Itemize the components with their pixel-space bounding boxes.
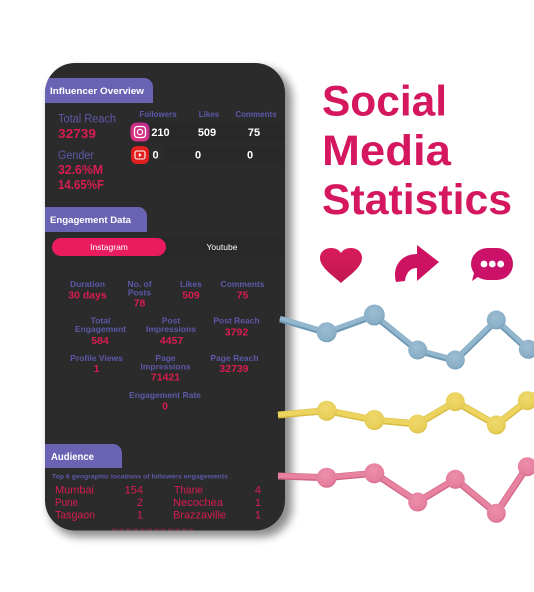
metric: comments [220, 281, 264, 298]
locations table: 1 [255, 510, 261, 522]
line chart: yellow series [278, 391, 534, 434]
metric: page impressions [141, 355, 190, 380]
metric: post impressions: 4457 [160, 335, 183, 347]
table header: Followers [139, 110, 177, 119]
locations table: 154 [125, 484, 143, 496]
toggle: instagram / youtube: Instagram [90, 242, 128, 252]
icon: heart [320, 248, 362, 283]
metric: post impressions: Impressions [146, 324, 196, 334]
icon: comment bubble [471, 248, 513, 281]
stat: gender: 32.6%M [58, 163, 103, 177]
locations table: 4 [255, 484, 261, 496]
metric: page reach [210, 355, 258, 372]
row: instagram [130, 122, 260, 142]
row: instagram: 509 [198, 127, 216, 139]
row: instagram: 75 [248, 127, 260, 139]
row: instagram: 210 [151, 127, 170, 139]
metric: post impressions: Post [162, 316, 180, 326]
metric: likes [180, 281, 202, 298]
tab: Influencer Overview: Influencer Overview [50, 86, 145, 97]
metric: total engagement [76, 318, 126, 344]
metric: engagement rate: Engagement Rate [129, 390, 201, 400]
metric: post impressions [146, 318, 196, 344]
phone panel [45, 63, 292, 537]
title: Media [322, 128, 451, 175]
metric: engagement rate: 0 [162, 400, 168, 412]
locations table: 1 [255, 497, 261, 509]
table header: Likes [199, 110, 220, 119]
metric: page reach: 32739 [219, 363, 249, 375]
metric: page impressions: Page [155, 353, 176, 363]
toggle: instagram / youtube: Youtube [207, 242, 238, 252]
stat: gender [58, 150, 104, 192]
metric: page impressions: Impressions [140, 362, 191, 372]
locations table: Pune [55, 497, 78, 509]
metric: likes: 509 [182, 290, 200, 302]
tab: Audience [45, 444, 122, 468]
locations table: Brazzaville [173, 510, 226, 522]
metric: page reach: Page Reach [210, 353, 259, 363]
table header: Comments [235, 110, 277, 119]
metric: duration: Duration [70, 279, 105, 289]
metric: profile views: 1 [94, 363, 100, 375]
icon: instagram [130, 122, 150, 142]
row: youtube [131, 146, 253, 164]
metric: duration: 30 days [68, 290, 107, 302]
tab: Audience: Audience [51, 452, 94, 463]
metric: number of posts: No. of [127, 279, 152, 289]
metric: post reach [214, 318, 260, 336]
icon: share arrow [395, 245, 439, 282]
locations table [55, 484, 261, 522]
stat: gender: 14.65%F [58, 178, 104, 192]
stat: total reach [58, 114, 116, 138]
metric: likes: Likes [180, 279, 202, 289]
stat: gender: Gender [58, 150, 94, 162]
tab: Influencer Overview [45, 78, 153, 103]
subheading: top locations: Top 6 geographic locations of followers engagements [52, 474, 228, 480]
icon: youtube [131, 146, 149, 164]
row: youtube: 0 [195, 150, 201, 162]
toggle: instagram / youtube [52, 238, 238, 256]
stat: total reach: Total Reach [58, 114, 116, 126]
metric: number of posts: Posts [128, 288, 151, 298]
metric: total engagement: Engagement [75, 324, 126, 334]
section: audience [45, 444, 261, 530]
metric: page impressions: 71421 [151, 372, 180, 384]
line chart: pink series [278, 457, 534, 523]
metric: profile views: Profile Views [70, 353, 123, 363]
metric: profile views [70, 355, 122, 372]
title: Statistics [322, 177, 512, 224]
metric: duration [68, 281, 106, 300]
metric: total engagement: 584 [91, 335, 109, 347]
stat: total reach: 32739 [58, 126, 96, 141]
locations table: 2 [137, 497, 143, 509]
locations table: Thane [174, 484, 203, 496]
table header [140, 111, 276, 117]
line chart: blue series [280, 304, 534, 370]
title [322, 78, 512, 224]
locations table: Tasgaon [55, 510, 95, 522]
metric: post reach: Post Reach [213, 316, 260, 326]
locations table: 1 [137, 510, 143, 522]
locations table: Mumbai [55, 484, 94, 496]
metric: engagement rate [130, 392, 200, 410]
tab: Engagement Data [45, 207, 147, 232]
row: youtube: 0 [152, 150, 159, 162]
metric: comments: Comments [221, 279, 265, 289]
title: Social [322, 78, 447, 126]
metric: comments: 75 [237, 290, 248, 302]
metric: total engagement: Total [91, 316, 110, 326]
metric: number of posts [128, 281, 152, 306]
section: engagement data [45, 207, 284, 412]
row: youtube: 0 [247, 150, 253, 162]
metric: number of posts: 78 [134, 298, 145, 310]
tab: Engagement Data: Engagement Data [50, 215, 132, 226]
locations table: Necochea [173, 497, 224, 509]
section: influencer overview [45, 78, 276, 189]
metric: post reach: 3792 [225, 326, 248, 338]
